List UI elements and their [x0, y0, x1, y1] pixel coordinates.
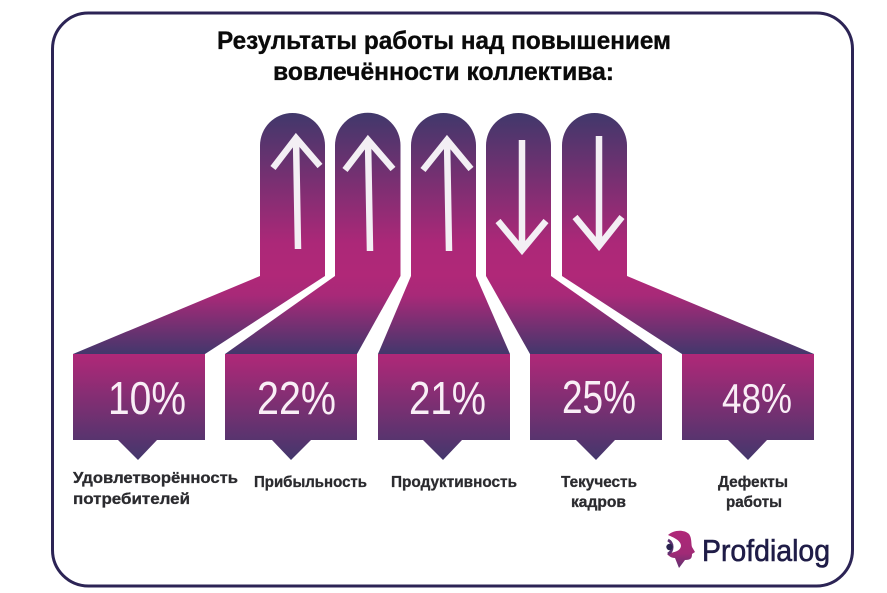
- rounded tab with up arrow: [260, 113, 325, 276]
- label: [561, 474, 637, 511]
- logo: Profdialog: [666, 531, 830, 568]
- connector: [378, 276, 510, 354]
- icon: head profile: [666, 531, 695, 568]
- label: Удовлетворённость: [73, 470, 238, 487]
- connector: [486, 276, 662, 354]
- value box: [530, 354, 662, 460]
- value box: 25%: [562, 371, 636, 423]
- label: потребителей: [73, 491, 190, 508]
- connector: [73, 276, 325, 354]
- column 3: productivity: [378, 113, 517, 491]
- rounded tab with down arrow: [562, 113, 627, 276]
- label: работы: [726, 494, 782, 511]
- label: кадров: [571, 494, 626, 511]
- title: [217, 27, 671, 86]
- label: [73, 470, 238, 508]
- value box: [378, 354, 510, 460]
- column 2: profitability: [225, 113, 400, 491]
- column 5: work defects: [562, 113, 814, 511]
- rounded tab with up arrow: [411, 113, 476, 276]
- value box: 21%: [409, 372, 486, 424]
- column 4: staff turnover: [486, 113, 662, 511]
- value box: 22%: [257, 372, 336, 424]
- value box: [682, 354, 814, 460]
- rounded tab with up arrow: [335, 113, 400, 276]
- rounded tab with down arrow: [486, 113, 551, 276]
- label: Прибыльность: [254, 474, 367, 491]
- value box: [225, 354, 357, 460]
- label: Продуктивность: [391, 474, 517, 491]
- column 1: customer satisfaction: [73, 113, 325, 508]
- value box: 10%: [108, 372, 186, 424]
- connector: [562, 276, 814, 354]
- connector: [225, 276, 400, 354]
- title: вовлечённости коллектива:: [273, 58, 614, 86]
- value box: [73, 354, 205, 460]
- logo: Profdialog: Profdialog: [702, 533, 830, 568]
- label: Дефекты: [718, 474, 788, 491]
- value box: 48%: [722, 375, 792, 422]
- title: Результаты работы над повышением: [217, 27, 671, 55]
- label: Текучесть: [561, 474, 637, 491]
- label: [718, 474, 788, 511]
